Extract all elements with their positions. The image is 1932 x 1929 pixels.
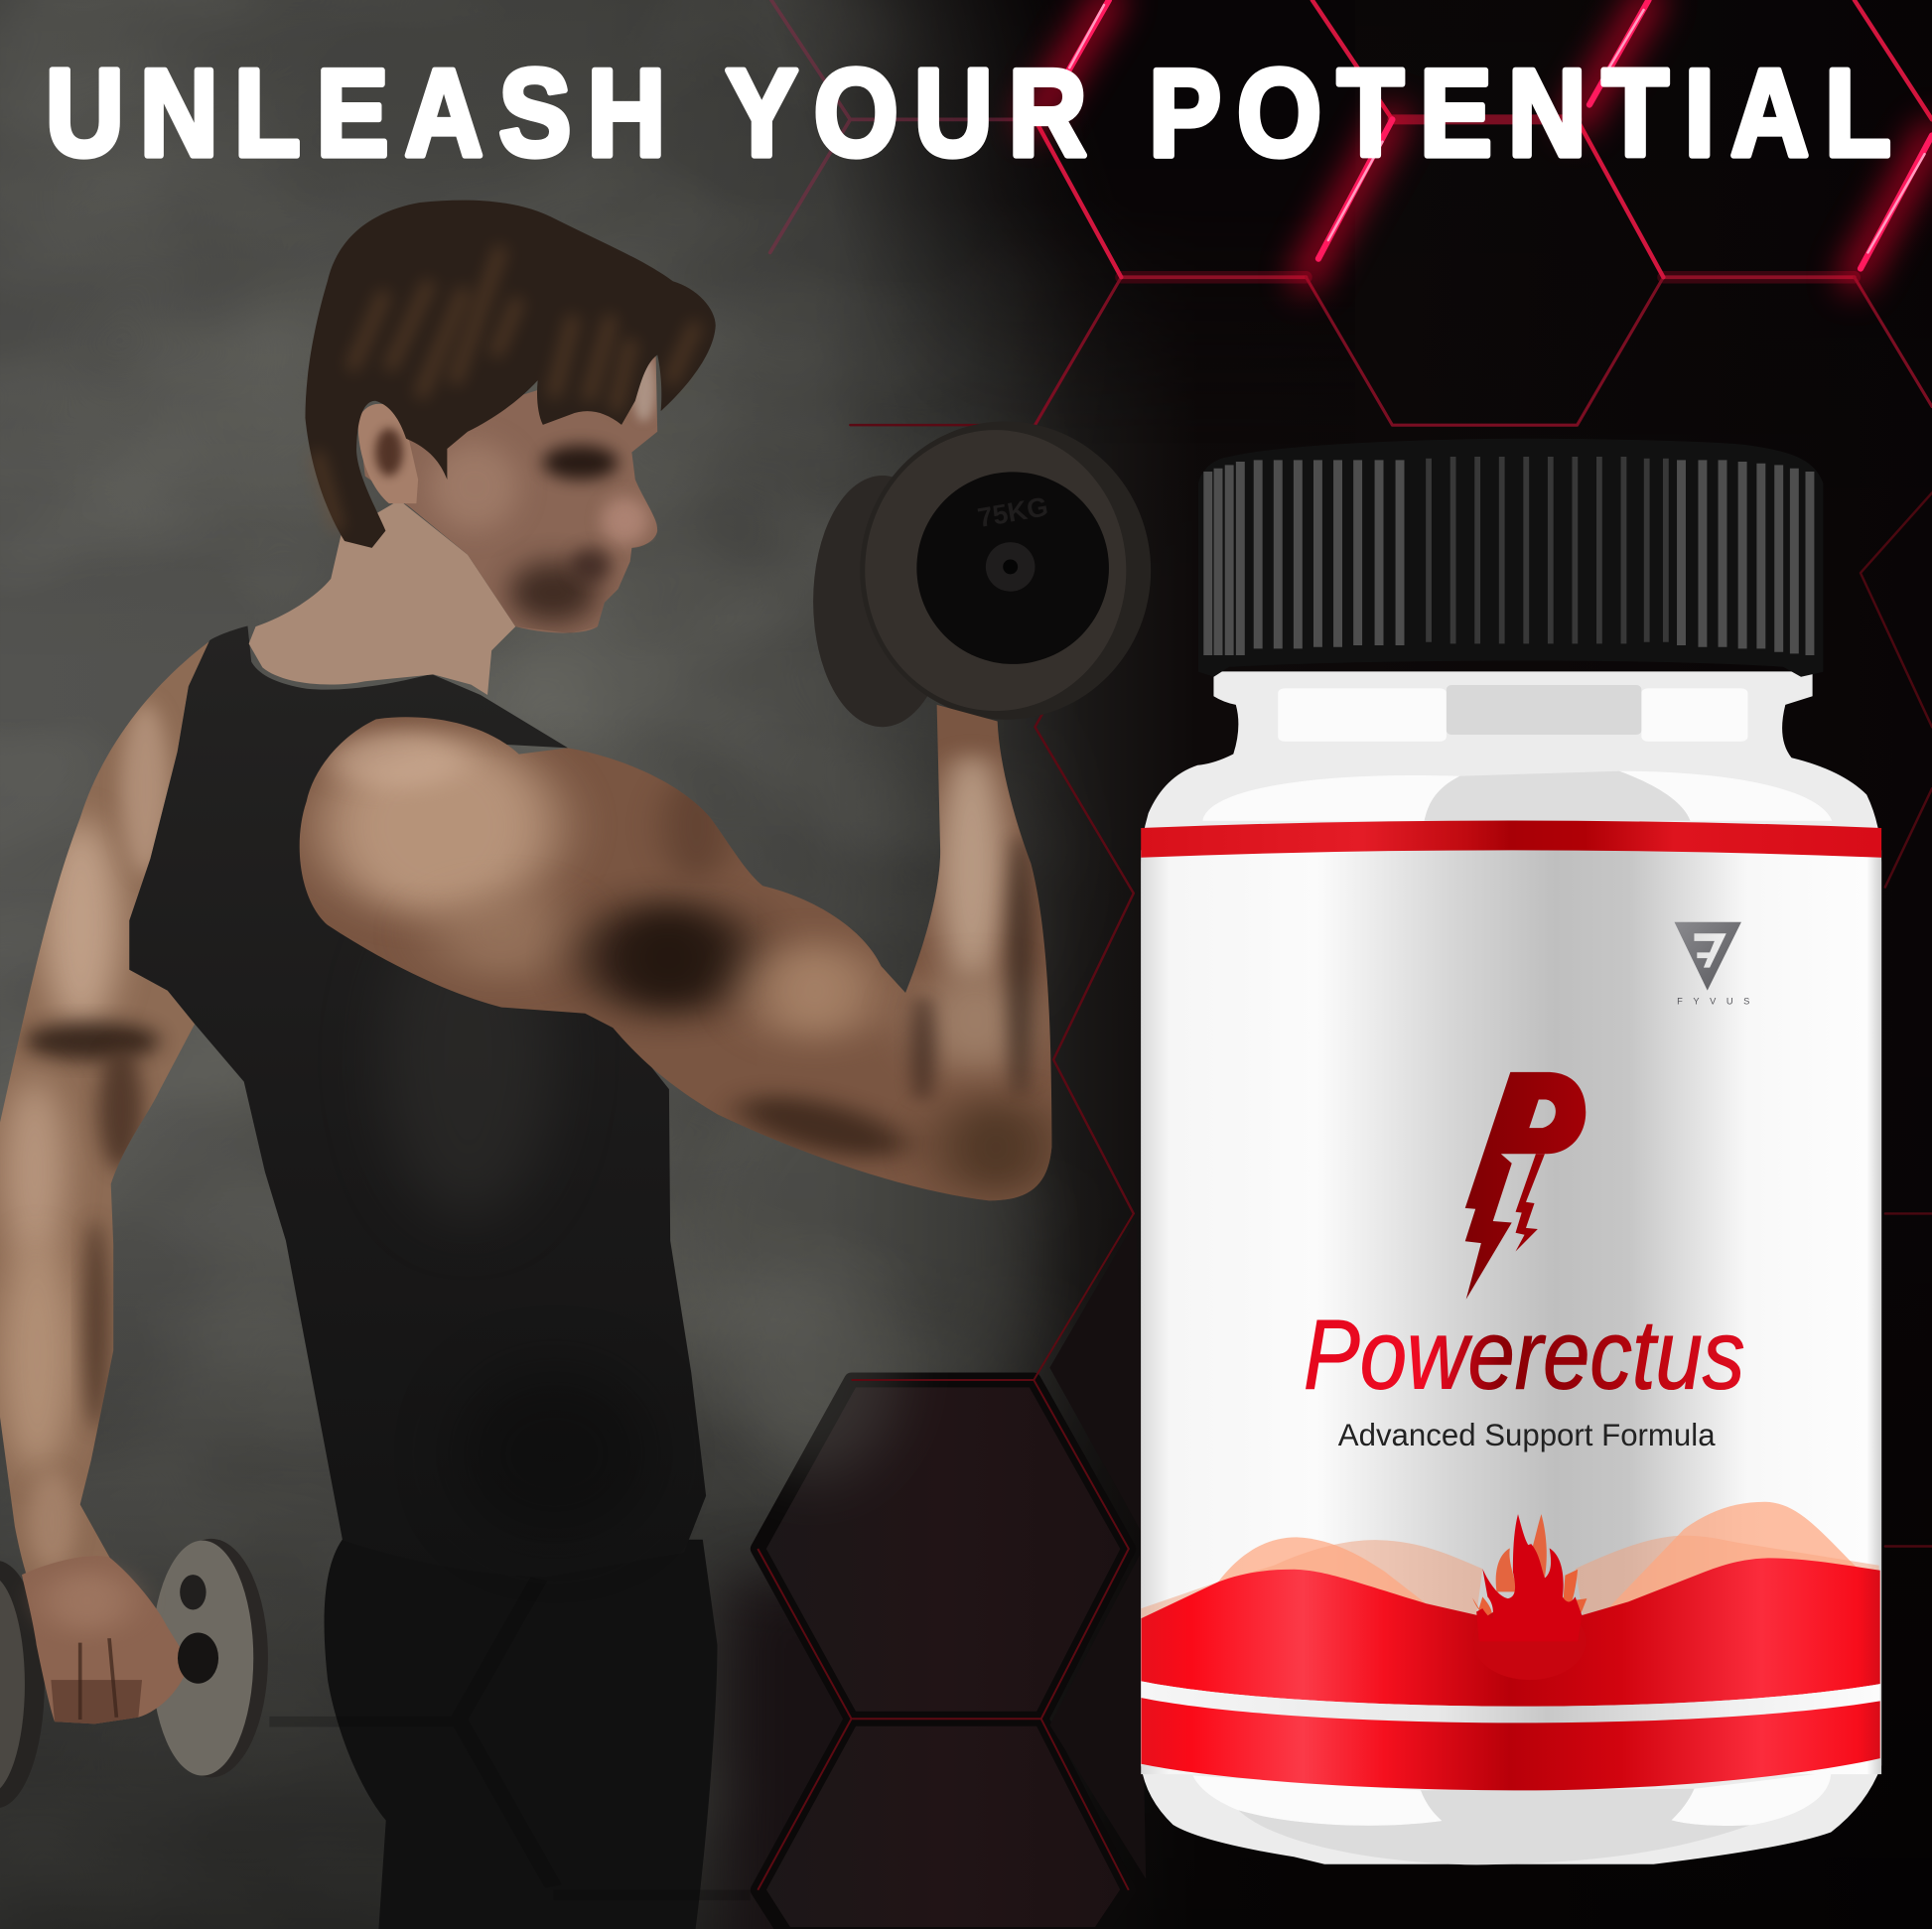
logo mark: P lightning <box>1465 1072 1586 1300</box>
dumbbell: raised <box>813 421 1151 727</box>
top red band <box>1141 821 1881 858</box>
flame icon <box>1472 1514 1587 1680</box>
neck <box>249 500 515 695</box>
logo: FYVUS <box>1675 922 1749 1006</box>
brand: Powerectus: Powerectus <box>1304 1301 1744 1411</box>
peach wave right front <box>1608 1502 1857 1608</box>
logo: FYVUS: FYVUS <box>1677 996 1749 1006</box>
small lightning bolt <box>1516 1154 1545 1252</box>
background: lower hexagon cells <box>727 1213 1146 1929</box>
head <box>305 201 716 633</box>
person: bodybuilder lifting dumbbells <box>0 201 1151 1929</box>
white stripe <box>1142 1681 1880 1722</box>
label <box>1141 850 1881 1774</box>
peach wave left back <box>1142 1540 1482 1618</box>
red wave <box>1142 1558 1880 1707</box>
neck and shoulder reflections <box>1202 685 1832 821</box>
hexagon bands across shorts <box>269 1580 750 1895</box>
cap <box>1198 439 1823 677</box>
bottle body <box>1141 671 1881 1864</box>
peach wave right back <box>1576 1536 1879 1615</box>
dumbbell: raised: 75KG <box>975 490 1050 533</box>
bottom reflections <box>1193 1772 1831 1864</box>
dumbbell: lower left <box>0 1539 268 1808</box>
title: UNLEASH YOUR POTENTIAL <box>46 44 1891 182</box>
ear <box>358 404 418 503</box>
product bottle <box>1141 439 1881 1864</box>
singlet <box>129 625 706 1578</box>
peach wave left front <box>1218 1537 1426 1603</box>
background: smoky backdrop <box>0 0 1165 1929</box>
background: glowing hexagon grid <box>770 0 1932 1547</box>
tagline: Advanced Support Formula <box>1338 1418 1716 1452</box>
right arm flexing <box>300 705 1051 1200</box>
shorts <box>325 1540 717 1929</box>
lower red band <box>1142 1698 1880 1790</box>
left fist <box>22 1556 218 1723</box>
face <box>358 349 657 633</box>
red waves and flame <box>1142 1502 1880 1790</box>
left arm and back <box>0 639 211 1601</box>
hair <box>305 201 716 548</box>
